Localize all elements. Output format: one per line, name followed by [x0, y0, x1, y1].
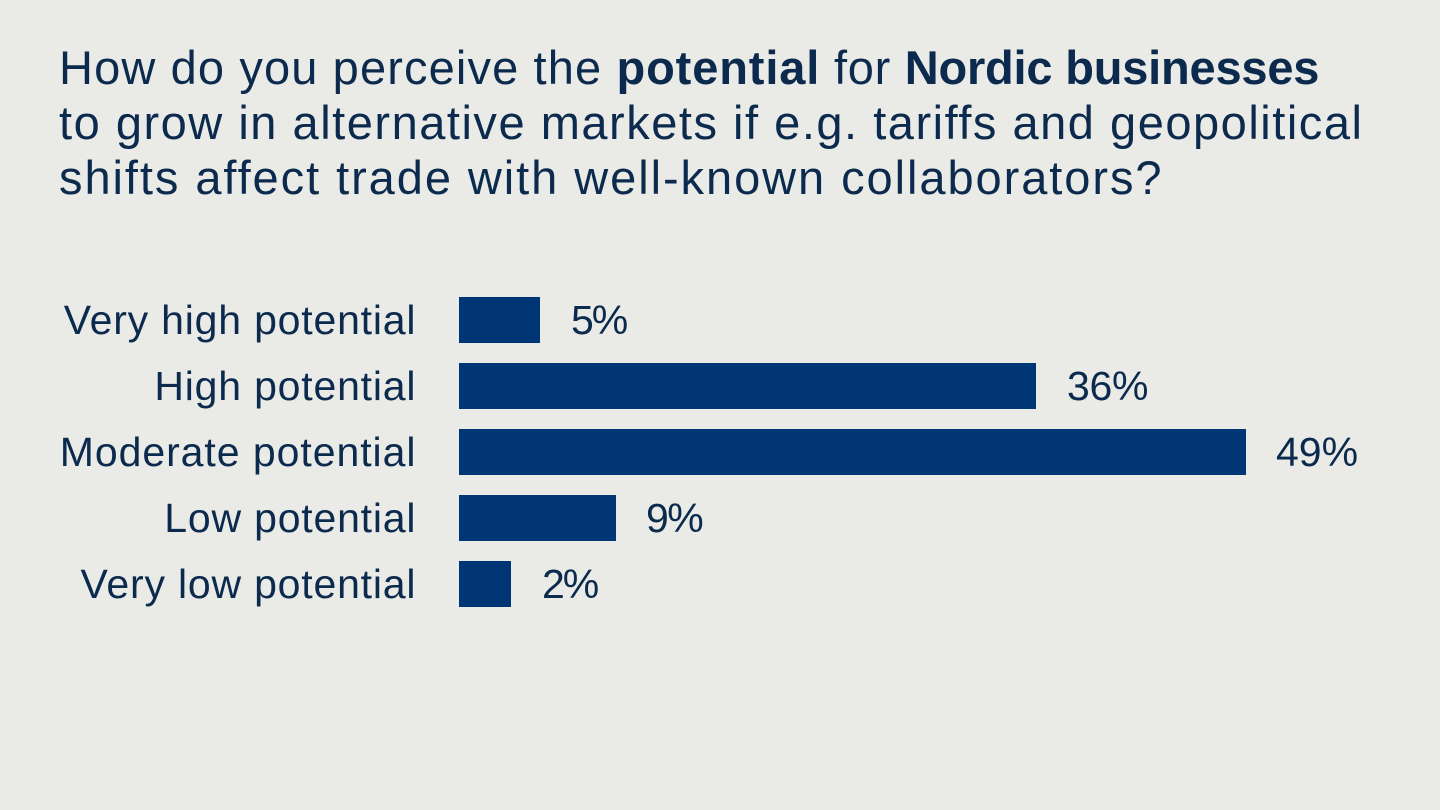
title: to grow in alternative markets if e.g. tariffs and geopolitical	[59, 96, 1363, 149]
title: How do you perceive the potential for Nordic businesses	[59, 41, 1319, 94]
label: Very high potential: Very high potential	[64, 297, 416, 343]
bar: Low potential	[459, 495, 616, 541]
bar: Moderate potential	[459, 429, 1246, 475]
label: High potential: High potential	[154, 363, 416, 409]
label: Very low potential: Very low potential	[81, 561, 416, 607]
value: 5%: 5%	[571, 297, 626, 343]
bar chart	[60, 297, 1358, 607]
value: 2%: 2%	[542, 561, 597, 607]
label: Moderate potential: Moderate potential	[60, 429, 416, 475]
bar: Very high potential	[459, 297, 540, 343]
bar: Very low potential	[459, 561, 511, 607]
value: 9%: 9%	[646, 495, 702, 541]
title	[59, 41, 1363, 204]
title: shifts affect trade with well-known collaborators?	[59, 151, 1164, 204]
value: 49%: 49%	[1276, 429, 1358, 475]
label: Low potential: Low potential	[164, 495, 416, 541]
value: 36%: 36%	[1067, 363, 1148, 409]
bar: High potential	[459, 363, 1036, 409]
